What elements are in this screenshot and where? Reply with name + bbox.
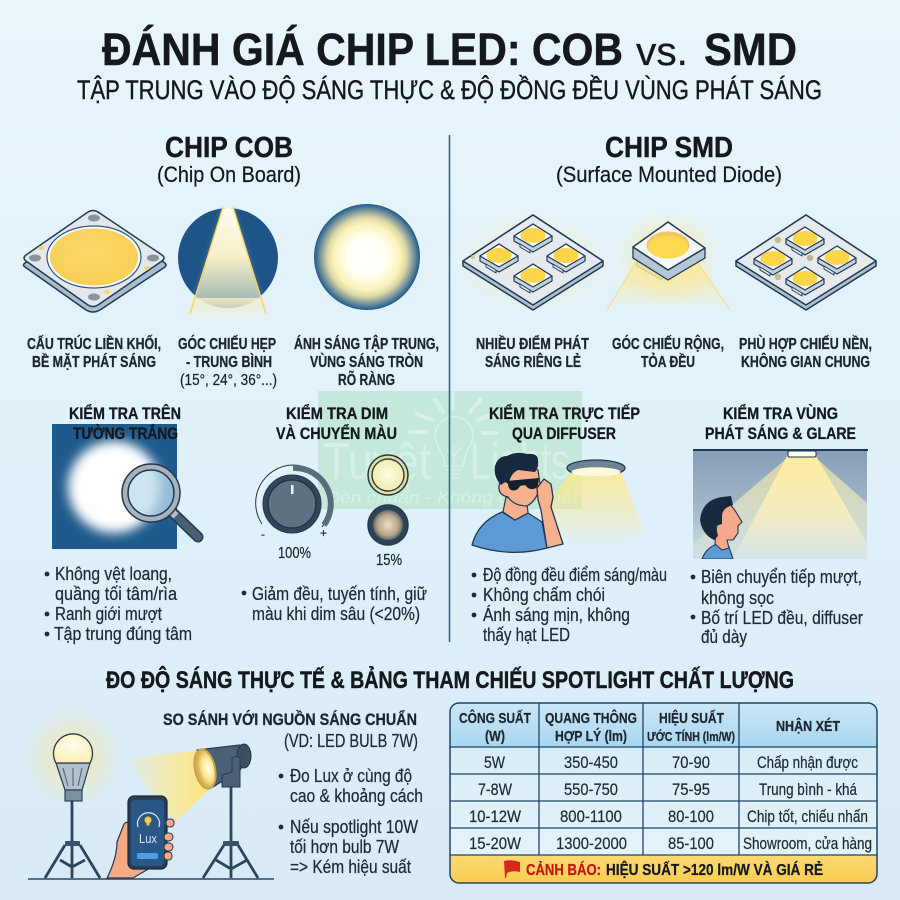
heading: compare with reference source: SO SÁNH VỚI NGUỒN SÁNG CHUẨN	[163, 710, 417, 729]
heading: chip SMD: (Surface Mounted Diode)	[556, 162, 782, 187]
table row 5W: Chấp nhận được	[757, 754, 858, 772]
table row 15-20W: 85-100	[668, 835, 714, 853]
icon: person viewing glare area	[693, 450, 868, 559]
caption: wide angle	[612, 334, 724, 371]
title: vs.: vs.	[636, 30, 688, 74]
heading: diffuser test: KIỂM TRA TRỰC TIẾP	[489, 404, 640, 423]
table header: QUANG THÔNG	[545, 709, 637, 727]
icon: hand with lux-meter phone	[107, 796, 174, 878]
bullets: diffuser test	[472, 565, 667, 645]
bullets: glare test: không sọc	[701, 588, 774, 608]
caption: monolithic structure: CẤU TRÚC LIỀN KHỐI,	[27, 333, 161, 353]
caption: wide angle: GÓC CHIẾU RỘNG,	[612, 334, 724, 353]
icon: bulb on tripod	[23, 707, 123, 878]
icon: COB chip	[24, 210, 166, 312]
caption: narrow angle: GÓC CHIẾU HẸP	[178, 334, 276, 353]
table header: HIỆU SUẤT	[659, 709, 724, 727]
bullets: dim test	[242, 584, 427, 624]
bullets: measurement: Nếu spotlight 10W	[290, 817, 418, 837]
table row 10-12W	[469, 808, 868, 826]
bullets: measurement: cao & khoảng cách	[290, 786, 423, 806]
heading: dim test: VÀ CHUYỂN MÀU	[276, 424, 397, 443]
warning row: CẢNH BÁO:	[526, 860, 601, 879]
icon: single SMD chip with wide beam	[607, 210, 730, 310]
table row 7-8W: Trung bình - khá	[759, 781, 858, 799]
table row 7-8W: 7-8W	[478, 781, 512, 799]
bullets: wall test: Không vệt loang,	[55, 564, 172, 584]
caption: focused light: RÕ RÀNG	[338, 369, 395, 389]
heading: dim test	[276, 404, 397, 443]
table row 5W: 70-90	[672, 754, 710, 772]
icon: man with sunglasses and diffuser	[472, 453, 644, 552]
table header: NHẬN XÉT	[776, 717, 840, 735]
caption: many emitting points: NHIỀU ĐIỂM PHÁT	[476, 334, 589, 353]
watermark: Lights	[470, 433, 570, 491]
heading: compare with reference source: (VD: LED BULB 7W)	[284, 731, 418, 751]
table row 15-20W: Showroom, cửa hàng	[743, 835, 872, 853]
ground line	[28, 878, 274, 880]
caption: many emitting points: SÁNG RIÊNG LẺ	[485, 352, 581, 371]
heading: glare test	[705, 404, 856, 443]
heading: glare test: KIỂM TRA VÙNG	[723, 404, 838, 423]
bullets: diffuser test: Độ đồng đều điểm sáng/màu	[483, 565, 667, 585]
table row 10-12W: 800-1100	[560, 808, 622, 826]
caption: narrow angle: (15°, 24°, 36°...)	[180, 372, 277, 389]
heading: chip SMD	[556, 132, 782, 187]
icon: dimmer knob: +	[320, 526, 327, 540]
heading: chip SMD: CHIP SMD	[605, 132, 733, 164]
bullets: wall test: quầng tối tâm/rìa	[55, 584, 178, 604]
table row 10-12W: 80-100	[668, 808, 714, 826]
bullets: measurement	[279, 766, 423, 877]
caption: wide angle: TỎA ĐỀU	[641, 352, 695, 371]
table header: ƯỚC TÍNH (lm/W)	[647, 729, 735, 744]
icon: dimmer knob	[256, 465, 331, 541]
table row 15-20W	[469, 835, 872, 853]
icon: dimmer knob: -	[261, 527, 265, 541]
icon: dim lamp at 15%	[368, 505, 408, 545]
table row 5W: 350-450	[564, 754, 618, 772]
icon: SMD board for ambient lighting	[736, 215, 876, 310]
heading: chip COB: (Chip On Board)	[157, 162, 301, 187]
dimmer label 15%: 15%	[376, 552, 402, 569]
caption: narrow angle	[178, 334, 277, 389]
heading: dim test: KIỂM TRA DIM	[286, 404, 388, 423]
title: SMD: SMD	[704, 24, 797, 75]
table row 5W: 5W	[484, 754, 505, 772]
table header	[459, 709, 840, 745]
heading: chip COB: CHIP COB	[165, 132, 293, 164]
divider between COB and SMD	[448, 135, 450, 642]
bullets: diffuser test: thấy hạt LED	[483, 625, 570, 645]
caption: narrow angle: - TRUNG BÌNH	[186, 352, 272, 371]
caption: focused light	[294, 334, 439, 389]
icon: hand with lux-meter phone: Lux	[139, 831, 157, 846]
table header: (W)	[485, 728, 505, 745]
table row 7-8W	[478, 781, 858, 799]
bullets: wall test: Ranh giới mượt	[55, 604, 162, 624]
heading: white wall test: KIỂM TRA TRÊN	[69, 404, 181, 423]
table header: HỢP LÝ (lm)	[555, 727, 627, 745]
bullets: dim test: Giảm đều, tuyến tính, giữ	[252, 584, 427, 604]
watermark	[318, 391, 582, 509]
heading: white wall test	[69, 404, 181, 443]
bullets: wall test: Tập trung đúng tâm	[54, 624, 192, 644]
icon: white wall test with magnifier	[52, 424, 198, 549]
bullets: measurement: Đo Lux ở cùng độ	[290, 766, 412, 786]
table row 5W	[484, 754, 858, 772]
bullets: glare test	[691, 567, 863, 647]
icon: spotlight beam	[123, 751, 212, 822]
bullets: glare test: đủ dày	[701, 627, 747, 647]
reference table	[450, 703, 877, 883]
heading: glare test: PHÁT SÁNG & GLARE	[705, 424, 856, 443]
watermark: Đèn chuẩn - Không gian chất	[326, 488, 578, 507]
heading: diffuser test	[489, 404, 640, 443]
warning row	[504, 860, 823, 879]
table row 10-12W: 10-12W	[469, 808, 521, 826]
title: ĐÁNH GIÁ CHIP LED: COB	[102, 24, 623, 75]
caption: monolithic structure: BỀ MẶT PHÁT SÁNG	[32, 352, 156, 371]
bullets: glare test: Biên chuyển tiếp mượt,	[701, 567, 862, 587]
bullets: dim test: màu khi dim sâu (<20%)	[252, 604, 420, 624]
caption: many emitting points	[476, 334, 589, 371]
icon: spotlight on tripod	[191, 744, 258, 878]
caption: focused light: ÁNH SÁNG TẬP TRUNG,	[294, 334, 439, 353]
heading: diffuser test: QUA DIFFUSER	[512, 424, 616, 443]
table row 15-20W: 15-20W	[469, 835, 521, 853]
watermark: Tuyệt	[323, 433, 431, 491]
dimmer label 100%: 100%	[278, 545, 311, 562]
table header: CÔNG SUẤT	[459, 709, 531, 727]
icon: focused light circle	[314, 204, 420, 310]
table row 10-12W: Chip tốt, chiếu nhấn	[747, 808, 868, 826]
heading: chip COB	[157, 132, 301, 187]
table row 7-8W: 550-750	[564, 781, 618, 799]
heading: compare with reference source	[163, 710, 418, 751]
caption: monolithic structure	[27, 333, 161, 371]
icon: SMD board with four chips	[453, 210, 613, 314]
icon: bright lamp at 100%	[368, 455, 408, 495]
bullets: diffuser test: Không chấm chói	[483, 585, 605, 605]
caption: focused light: VÙNG SÁNG TRÒN	[310, 352, 423, 371]
bullets: diffuser test: Ánh sáng mịn, không	[483, 605, 630, 625]
bullets: measurement: tối hơn bulb 7W	[290, 837, 399, 857]
bullets: glare test: Bố trí LED đều, diffuser	[701, 608, 863, 628]
icon: narrow beam angle	[178, 207, 278, 320]
table row 15-20W: 1300-2000	[556, 835, 627, 853]
bullets: measurement: => Kém hiệu suất	[290, 857, 411, 877]
table row 7-8W: 75-95	[672, 781, 710, 799]
warning row: HIỆU SUẤT >120 lm/W VÀ GIÁ RẺ	[606, 860, 823, 879]
heading: white wall test: TƯỜNG TRẮNG	[73, 424, 178, 443]
bullets: wall test	[45, 564, 192, 644]
caption: ambient use	[739, 334, 872, 371]
